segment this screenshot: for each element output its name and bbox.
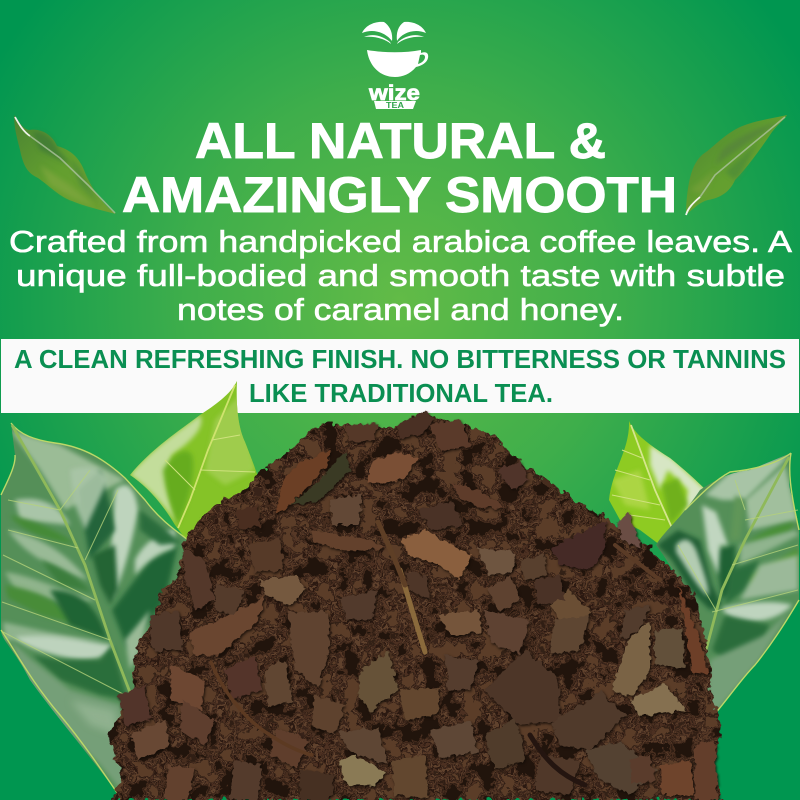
pile base bbox=[100, 405, 730, 800]
icon: small lime leaf right bbox=[609, 421, 704, 543]
logo band: TEA bbox=[386, 101, 404, 110]
callout text: LIKE TRADITIONAL TEA. bbox=[249, 378, 553, 408]
tea leaf pile bbox=[100, 405, 730, 800]
icon: right leaf brow bbox=[397, 22, 426, 44]
heading: ALL NATURAL & bbox=[195, 113, 606, 169]
icon: large glossy leaf left bbox=[0, 420, 195, 800]
callout text bbox=[14, 344, 786, 408]
description text bbox=[9, 224, 792, 327]
icon: large glossy leaf right bbox=[656, 452, 800, 712]
callout text: A CLEAN REFRESHING FINISH. NO BITTERNESS OR TANNINS bbox=[14, 344, 786, 374]
icon: top right leaf bbox=[686, 115, 787, 215]
icon: left leaf brow bbox=[362, 22, 392, 44]
icon: small lime leaf left bbox=[130, 381, 258, 538]
stems bbox=[211, 522, 660, 785]
callout band bbox=[1, 339, 799, 413]
description text: notes of caramel and honey. bbox=[177, 292, 624, 327]
icon: top left leaf bbox=[14, 115, 116, 214]
description text: unique full-bodied and smooth taste with subtle bbox=[16, 258, 785, 293]
heading bbox=[122, 113, 677, 223]
description text: Crafted from handpicked arabica coffee leaves. A bbox=[9, 224, 792, 259]
heading: AMAZINGLY SMOOTH bbox=[122, 167, 677, 223]
logo wordmark: wize bbox=[368, 82, 420, 105]
icon: smiling cup bbox=[367, 50, 428, 77]
large flakes bbox=[118, 412, 718, 800]
logo: Wize Tea bbox=[362, 22, 428, 110]
